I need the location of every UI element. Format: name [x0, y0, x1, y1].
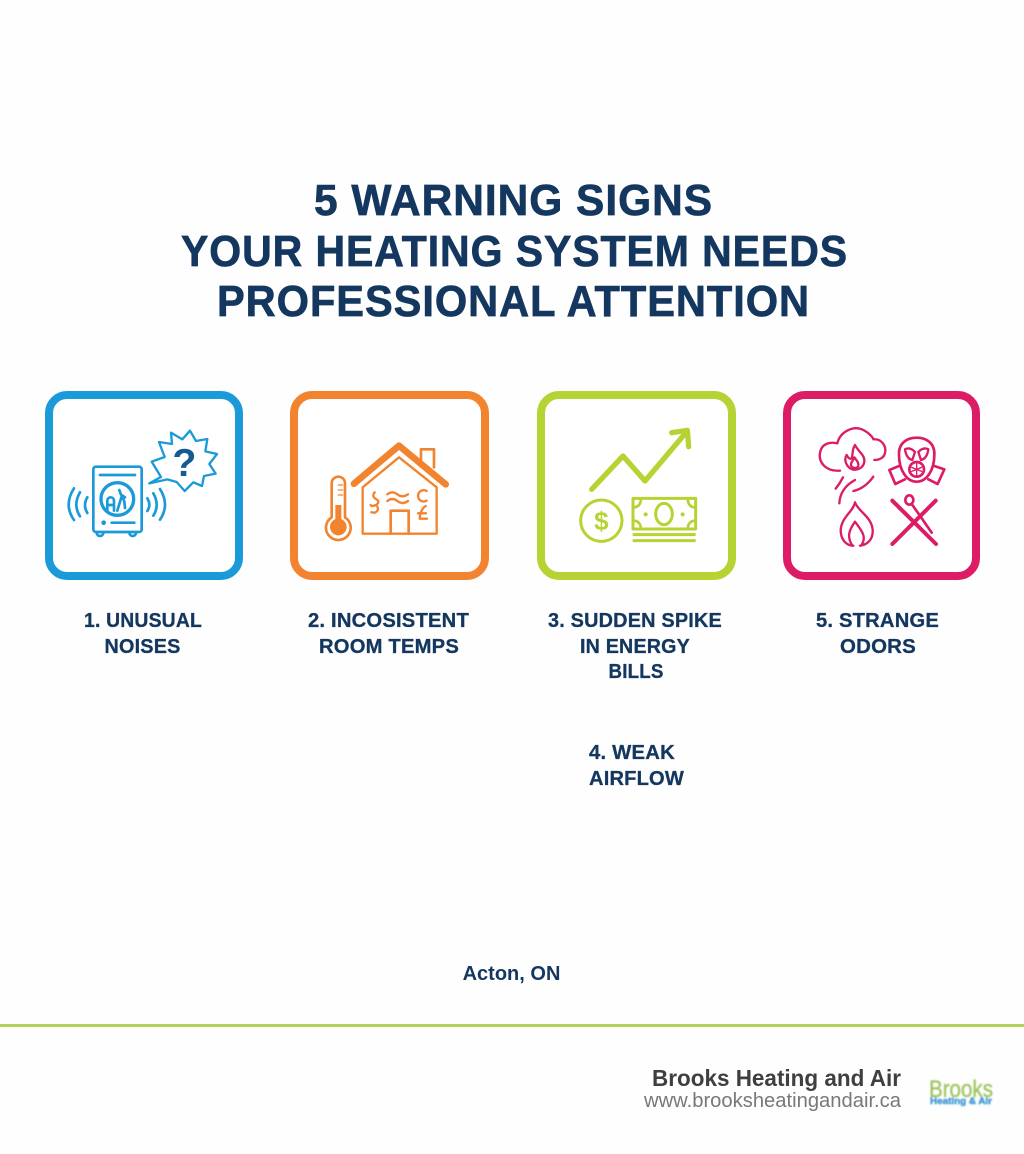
location text: Acton, ON — [463, 963, 560, 985]
footer divider — [0, 1024, 1024, 1027]
title — [181, 176, 848, 326]
icon: smoke, gas mask, flame, crossed matches — [820, 428, 944, 546]
label: 5. strange odors: ODORS — [840, 635, 916, 658]
label: 1. unusual noises: NOISES — [104, 635, 180, 658]
label: 5. strange odors — [816, 609, 939, 658]
icon: furnace with sound waves and question burst — [69, 431, 217, 536]
logo: Brooks — [929, 1076, 993, 1103]
label: 5. strange odors: 5. STRANGE — [816, 609, 939, 632]
footer company name: Brooks Heating and Air — [652, 1065, 901, 1091]
label: 3. sudden spike in energy bills — [548, 609, 722, 683]
label: 1. unusual noises: 1. UNUSUAL — [84, 609, 202, 632]
label: 2. inconsistent room temps — [308, 609, 469, 658]
label: 2. inconsistent room temps: ROOM TEMPS — [319, 635, 459, 658]
label: 1. unusual noises — [84, 609, 202, 658]
icon: rising arrow and money — [581, 430, 696, 541]
title: PROFESSIONAL ATTENTION — [217, 277, 810, 326]
icon: question mark: ? — [172, 441, 196, 485]
title: YOUR HEATING SYSTEM NEEDS — [181, 227, 848, 276]
label: 4. weak airflow: AIRFLOW — [589, 767, 684, 790]
footer website: www.brooksheatingandair.ca — [643, 1090, 902, 1112]
panel: strange odors icon — [787, 395, 976, 576]
panel: unusual noises icon — [49, 395, 239, 576]
label: 4. weak airflow — [589, 741, 684, 790]
logo: Heating & Air — [930, 1096, 993, 1106]
label: 3. sudden spike in energy bills: 3. SUDDEN SPIKE — [548, 609, 722, 632]
label: 3. sudden spike in energy bills: IN ENERGY — [580, 635, 690, 658]
label: 3. sudden spike in energy bills: BILLS — [608, 660, 664, 683]
panel: energy bills icon — [541, 395, 732, 576]
dollar sign: $ — [594, 506, 609, 536]
panel: room temperature icon — [294, 395, 485, 576]
label: 2. inconsistent room temps: 2. INCOSISTENT — [308, 609, 469, 632]
title: 5 WARNING SIGNS — [314, 176, 713, 225]
label: 4. weak airflow: 4. WEAK — [589, 741, 675, 764]
icon: thermometer and house — [326, 446, 446, 540]
